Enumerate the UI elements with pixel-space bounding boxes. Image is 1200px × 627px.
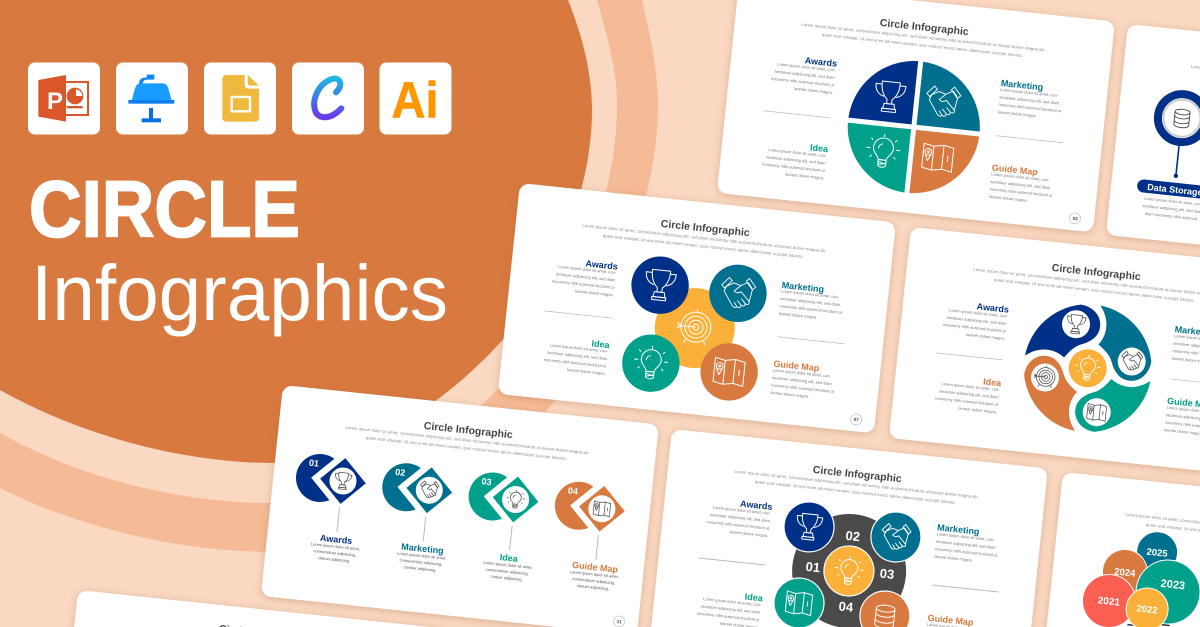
item 03 Idea: consectetuer adipiscing, xyxy=(486,567,529,576)
icon: handshake xyxy=(880,522,912,551)
text block: Guide Map: nonummy nibh euismod tincidunt ut xyxy=(771,382,835,394)
text block: Awards: Lorem ipsum dolor sit amet, con- xyxy=(713,505,772,516)
icon: database xyxy=(874,604,895,627)
slide: year bubbles xyxy=(1041,472,1200,627)
pin stem xyxy=(1173,146,1181,178)
text block: Guide Map: sectetuer adipiscing elit, sed diam xyxy=(990,179,1051,190)
item 01 Awards: consectetuer adipiscing, xyxy=(313,548,356,558)
page number xyxy=(1069,212,1081,224)
numbers: 02 xyxy=(845,528,861,544)
text block: Awards: sectetuer adipiscing elit, sed diam xyxy=(555,271,616,283)
slide title: Circle Infographic xyxy=(423,420,513,441)
icon: map xyxy=(713,357,745,386)
slide title: Circle Infographic xyxy=(879,17,969,38)
item 01 Awards: ctetuer adipiscing. xyxy=(318,555,350,563)
item 04 Guide Map: 04 xyxy=(567,485,578,496)
text block: Guide Map: Guide Map xyxy=(773,359,820,373)
text block: Idea: sectetuer adipiscing elit, sed diam xyxy=(700,603,761,615)
small dark icon fragments xyxy=(1127,621,1170,627)
slide: bottom-left partial xyxy=(56,590,454,627)
icon: trophy xyxy=(795,513,823,541)
text block: Marketing: nonummy nibh euismod tincidunt ut xyxy=(998,102,1062,113)
page number xyxy=(613,615,625,627)
circle diagram xyxy=(619,254,769,403)
text block: Idea xyxy=(761,138,830,181)
slide title: Circle Infographic xyxy=(812,464,902,485)
text block: Awards xyxy=(770,52,838,95)
item 02 Marketing xyxy=(374,454,464,574)
item 02 Marketing: Marketing xyxy=(401,541,444,556)
text block: Marketing: nonummy nibh euismod tincidunt ut xyxy=(935,546,999,558)
slide intro: Lorem ipsum dolor sit amet, consectetuer adipiscing elit, sed diam nonummy nibh euismod tincidunt ut laoreet dolore magna ali- xyxy=(345,425,590,455)
slide intro: Lorem ipsum dolor sit amet, consectetuer adipiscing elit, sed diam nonummy nibh euismod tincidunt ut laoreet dolore magna ali- xyxy=(582,223,827,253)
icon: PowerPoint xyxy=(28,62,100,134)
slide: numbered diamonds 11 xyxy=(261,385,659,627)
slide intro: quam erat volutpat. Ut wisi enim ad minim veniam, quis nostrud exerci tation ullamcorper suscipit lobortis. xyxy=(994,277,1195,303)
text block: Guide Map xyxy=(770,359,838,401)
text block: Idea: sectetuer adipiscing elit, sed diam xyxy=(939,388,1000,400)
text block: Marketing: sectetuer adipiscing elit, sed diam xyxy=(780,296,841,307)
text block: Idea: Lorem ipsum dolor sit amet, con- xyxy=(768,147,827,158)
icon: PowerPoint: P xyxy=(47,88,63,115)
icon: map xyxy=(785,591,813,616)
title: CIRCLE: CIRCLE xyxy=(29,164,300,254)
slide intro: quam erat volutpat. Ut wisi enim ad minim veniam, quis nostrud exerci tation ullamcorper suscipit lobortis. xyxy=(366,435,567,461)
text block: Marketing: nonummy nibh euismod tincidunt ut xyxy=(779,303,843,315)
text block: Idea: Lorem ipsum dolor sit amet, con- xyxy=(550,343,609,354)
item 03 Idea: Lorem ipsum dolor sit amet, xyxy=(483,560,533,570)
icon: bulb xyxy=(632,344,670,381)
numbers: 03 xyxy=(879,566,895,582)
text block: Awards: Lorem ipsum dolor sit amet, con- xyxy=(558,264,617,275)
icon: bulb xyxy=(865,132,902,169)
slide: data storage xyxy=(1106,24,1200,274)
text block: Idea: nonummy nibh euismod tincidunt ut xyxy=(935,395,999,407)
bubble 2025: 2025 xyxy=(1146,547,1169,560)
background ring: inner band xyxy=(0,0,617,503)
text block: Idea: Idea xyxy=(983,376,1003,388)
text block: Awards xyxy=(706,495,773,538)
item 04 Guide Map: ctetuer adipiscing. xyxy=(577,583,609,591)
item 01 Awards xyxy=(288,444,378,565)
text block: Awards xyxy=(551,255,618,298)
text block xyxy=(1142,196,1200,222)
item 04 Guide Map: Lorem ipsum dolor sit amet, xyxy=(570,569,619,579)
text block: Guide Map: laoreet dolore magna. xyxy=(770,390,809,399)
bubble 2025 xyxy=(1135,530,1180,575)
page number: 07 xyxy=(853,417,859,422)
swirl chart xyxy=(1024,305,1151,432)
icon: trophy xyxy=(873,80,906,113)
text block: Awards: Awards xyxy=(740,499,773,512)
slide title: Circle Infographic xyxy=(1051,262,1141,283)
icon: target xyxy=(675,307,713,346)
icon: bulb xyxy=(833,555,865,586)
text block: Marketing xyxy=(934,522,1001,565)
text block: Awards: laoreet dolore magna. xyxy=(729,529,769,538)
text block: Guide Map: Lorem ipsum dolor sit amet, con- xyxy=(773,367,832,379)
text block: Marketing: laoreet dolore magna. xyxy=(934,554,973,563)
page number: 03 xyxy=(1072,216,1078,221)
text block: Idea: Lorem ipsum dolor sit amet, con- xyxy=(703,596,762,607)
numbers: 01 xyxy=(805,559,821,575)
text block: Marketing: Marketing xyxy=(937,522,980,537)
slide intro: quam erat volutpat. Ut wisi enim ad minim veniam, quis nostrud exerci tation ullamcorper suscipit lobortis. xyxy=(822,32,1023,58)
orange circle xyxy=(0,0,592,463)
page number: 11 xyxy=(616,619,622,624)
slide: gear circle xyxy=(650,429,1048,627)
text block: Idea xyxy=(934,372,1003,415)
text block: Idea: nonummy nibh euismod tincidunt ut xyxy=(762,161,826,173)
slide: swirl xyxy=(889,227,1200,477)
text block: Awards: laoreet dolore magna. xyxy=(966,332,1005,341)
text block: Awards: Awards xyxy=(585,258,618,272)
item 03 Idea: Idea xyxy=(499,552,519,564)
text block: Marketing: laoreet dolore magna. xyxy=(998,109,1037,118)
text block: Awards: Awards xyxy=(804,55,838,69)
text block: Idea: nonummy nibh euismod tincidunt ut xyxy=(543,357,607,369)
item 03 Idea: 03 xyxy=(481,476,492,487)
page number xyxy=(850,413,862,425)
text block: Awards: nonummy nibh euismod tincidunt ut xyxy=(943,322,1007,334)
icon: handshake xyxy=(925,84,962,118)
bubble 2024 xyxy=(1100,547,1150,597)
bubble 2021 xyxy=(1080,572,1138,627)
text block: Marketing: Lorem ipsum dolor sit amet, con- xyxy=(1000,87,1059,98)
icon: Keynote xyxy=(116,62,188,134)
icon: Google Slides xyxy=(204,62,276,134)
text block: Awards: nonummy nibh euismod tincidunt ut xyxy=(552,278,616,290)
text block: Marketing: Lorem ipsum dolor sit amet, con- xyxy=(936,531,995,542)
text block: Awards: sectetuer adipiscing elit, sed diam xyxy=(710,512,771,523)
numbers xyxy=(801,524,899,619)
text block: Awards: nonummy nibh euismod tincidunt ut xyxy=(706,519,770,531)
item 03 Idea xyxy=(460,463,551,584)
bubble 2024: 2024 xyxy=(1114,566,1137,580)
item 04 Guide Map xyxy=(546,472,637,593)
text block: Idea: Idea xyxy=(744,592,764,603)
text block: Idea: sectetuer adipiscing elit, sed diam xyxy=(766,154,826,166)
swirl icons xyxy=(1030,311,1146,425)
subtitle: Infographics: Infographics xyxy=(31,248,448,337)
text block: Idea: laoreet dolore magna. xyxy=(785,171,824,180)
text block: Guide Map: Guide Map xyxy=(991,162,1039,177)
text block: Idea: Idea xyxy=(591,338,611,350)
text block: Marketing xyxy=(998,78,1065,121)
icon: trophy xyxy=(644,269,677,302)
bubble 2022: 2022 xyxy=(1136,603,1158,617)
gear diagram xyxy=(771,499,924,627)
text block: Awards: Awards xyxy=(976,301,1009,315)
bubble 2021: 2021 xyxy=(1097,595,1121,609)
item 02 Marketing: 02 xyxy=(395,467,406,478)
text block: Idea: laoreet dolore magna. xyxy=(567,367,606,376)
icon: Illustrator: Ai xyxy=(392,72,438,128)
text block: Awards: laoreet dolore magna. xyxy=(575,288,614,297)
text block: Awards xyxy=(942,298,1009,341)
text block: Guide Map xyxy=(1164,396,1200,439)
icon: map xyxy=(921,143,954,172)
item 02 Marketing: Lorem ipsum dolor sit amet, xyxy=(397,551,447,561)
slide title: Circle Infographic xyxy=(660,218,750,239)
text block: Guide Map: laoreet dolore magna. xyxy=(989,194,1028,203)
text block: Awards: laoreet dolore magna. xyxy=(794,86,833,95)
item 04 Guide Map: consectetuer adipiscing, xyxy=(572,576,615,585)
slide intro: Lorem ipsum dolor sit amet, consectetuer adipiscing elit, sed diam nonummy nibh euismod tincidunt ut laoreet dolore magna ali- xyxy=(801,22,1046,52)
slide: pie chart 03 xyxy=(717,0,1115,232)
text block: Idea: Idea xyxy=(810,142,830,154)
text block: Guide Map xyxy=(989,162,1056,205)
text block: Guide Map xyxy=(924,613,992,627)
item 03 Idea: ctetuer adipiscing. xyxy=(490,574,523,582)
icon: Canva xyxy=(292,62,364,134)
item 01 Awards: Awards xyxy=(320,533,353,546)
text block: Marketing: Lorem ipsum dolor sit amet, con- xyxy=(781,288,840,300)
text block: Idea xyxy=(696,587,764,627)
text block: Idea: laoreet dolore magna. xyxy=(958,405,997,415)
item 04 Guide Map: Guide Map xyxy=(572,560,619,575)
app icons row xyxy=(28,62,452,134)
text block: Awards: Lorem ipsum dolor sit amet, con- xyxy=(949,307,1008,319)
text block: Guide Map: nonummy nibh euismod tincidunt ut xyxy=(989,186,1053,198)
bubble 2022 xyxy=(1124,586,1170,627)
text block: Awards: sectetuer adipiscing elit, sed diam xyxy=(775,69,835,80)
background ring: outer band xyxy=(0,0,658,552)
text block: Idea xyxy=(543,334,611,376)
text block: Idea: Lorem ipsum dolor sit amet, con- xyxy=(941,381,1000,392)
text block: Guide Map: Lorem ipsum dolor sit amet, con- xyxy=(991,171,1050,183)
pie chart xyxy=(841,55,986,200)
slide intro xyxy=(1125,512,1200,550)
slide: five circles 07 xyxy=(498,183,896,433)
icon: handshake xyxy=(720,276,757,309)
pill label xyxy=(1137,179,1200,200)
bubble 2023 xyxy=(1133,557,1200,627)
text block: Idea: sectetuer adipiscing elit, sed diam xyxy=(547,350,608,361)
text block: Awards: nonummy nibh euismod tincidunt ut xyxy=(771,76,835,88)
item 01 Awards: 01 xyxy=(308,458,320,469)
text block: diam nonummy nibh euismod. xyxy=(1145,211,1198,221)
ring with database icon xyxy=(1156,92,1200,145)
text block: Marketing xyxy=(1171,324,1200,367)
text block: Marketing: laoreet dolore magna. xyxy=(779,311,818,320)
icon: Illustrator xyxy=(380,62,452,134)
numbers: 04 xyxy=(838,598,855,615)
text block: Marketing: Marketing xyxy=(781,280,825,294)
text block: Idea: nonummy nibh euismod tincidunt ut xyxy=(697,611,761,622)
slide intro: quam erat volutpat. Ut wisi enim ad minim veniam, quis nostrud exerci tation ullamcorper suscipit lobortis. xyxy=(603,233,804,259)
text block: Guide Map: sectetuer adipiscing elit, sed diam xyxy=(772,375,833,386)
text block: Marketing xyxy=(779,280,846,322)
text block: Marketing: sectetuer adipiscing elit, sed diam xyxy=(999,94,1060,106)
item 02 Marketing: consectetuer adipiscing, xyxy=(399,557,443,567)
bubble 2023: 2023 xyxy=(1160,578,1186,592)
item 01 Awards: Lorem ipsum dolor sit amet, xyxy=(311,541,360,551)
text block: Marketing: Marketing xyxy=(1000,78,1044,92)
text block: Awards: Lorem ipsum dolor sit amet, con- xyxy=(777,61,836,73)
text block: Awards: sectetuer adipiscing elit, sed diam xyxy=(946,315,1007,326)
slide intro: quam erat volutpat. Ut wisi enim ad minim veniam, quis nostrud exerci tation ullamcorper suscipit lobortis. xyxy=(755,479,956,505)
text block: Marketing: sectetuer adipiscing elit, sed diam xyxy=(935,539,996,550)
slide intro: Lorem ipsum dolor sit amet, consectetuer adipiscing elit, sed diam nonummy nibh euismod tincidunt ut laoreet dolore magna ali- xyxy=(734,469,979,499)
item 02 Marketing: ctetuer adipiscing. xyxy=(404,564,437,573)
